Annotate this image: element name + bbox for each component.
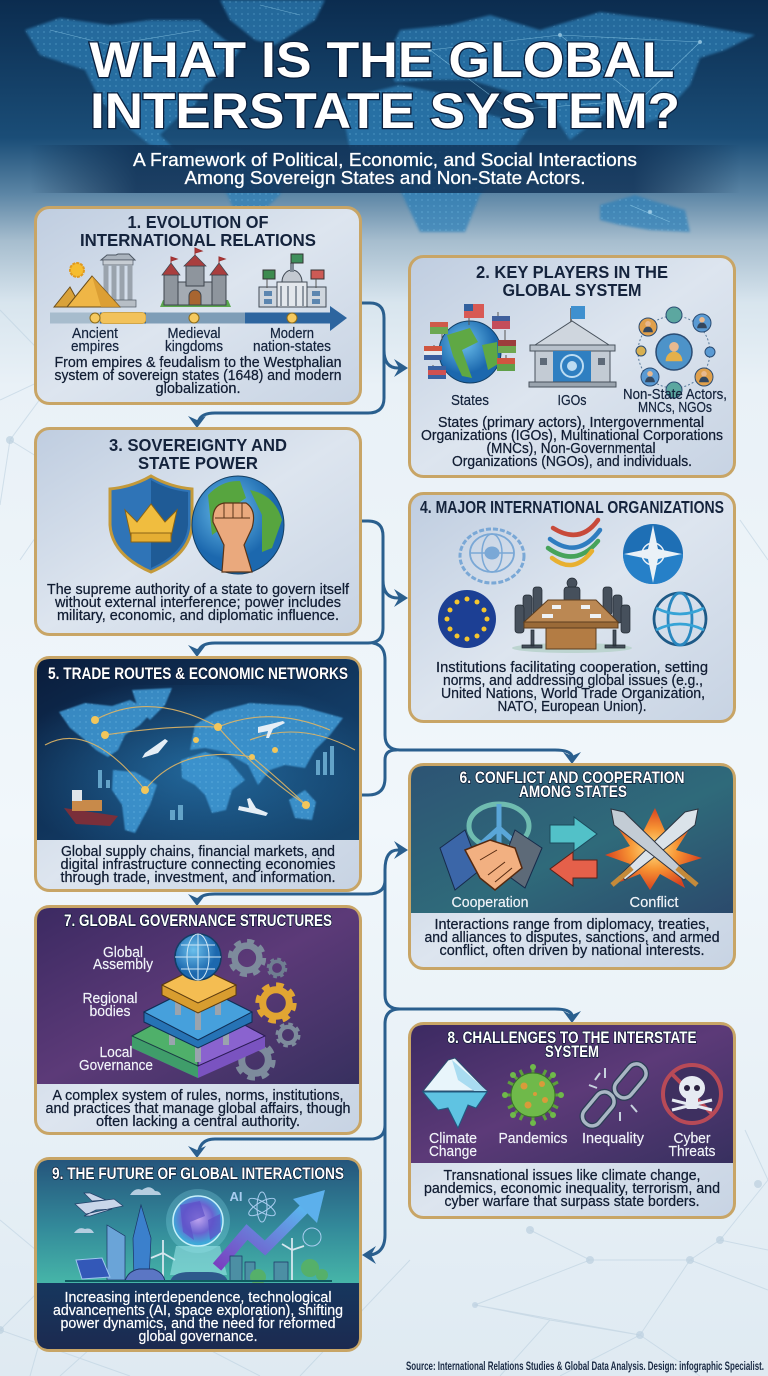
icon: globe with flags [424, 304, 516, 383]
labels 2: Non-State Actors, [623, 387, 727, 403]
heading 8: SYSTEM [545, 1042, 599, 1061]
description 1: system of sovereign states (1648) and modern [54, 368, 342, 384]
map network lights [50, 5, 702, 222]
description 3: without external interference; power includes [54, 595, 341, 611]
timeline labels: kingdoms [165, 339, 223, 355]
description 2: States (primary actors), Intergovernmental [438, 415, 704, 431]
labels 6: Conflict [630, 895, 678, 911]
labels 2: MNCs, NGOs [638, 400, 712, 416]
timeline labels: empires [71, 339, 119, 355]
description 4: United Nations, World Trade Organization, [441, 686, 705, 702]
heading 6 [460, 768, 684, 801]
labels 2 [451, 387, 727, 416]
labels 8: Pandemics [498, 1131, 568, 1147]
description 7: A complex system of rules, norms, institutions, [52, 1088, 344, 1104]
header world map [25, 0, 755, 232]
description 2 [421, 415, 723, 470]
description 9: Increasing interdependence, technological [64, 1290, 332, 1306]
description 7: often lacking a central authority. [96, 1114, 300, 1130]
icon: World Bank globe [654, 593, 706, 645]
governance labels: bodies [90, 1004, 130, 1020]
icon: modern capitol [259, 254, 326, 307]
description 5 [60, 844, 336, 886]
subtitle: Among Sovereign States and Non-State Actors. [184, 167, 586, 188]
timeline arrow [50, 306, 347, 331]
future scene illustration [37, 1160, 359, 1285]
governance labels: Local [100, 1045, 132, 1061]
description 6: conflict, often driven by national interests. [440, 943, 704, 959]
subtitle: A Framework of Political, Economic, and Social Interactions [133, 149, 637, 170]
heading 9: 9. THE FUTURE OF GLOBAL INTERACTIONS [52, 1164, 344, 1183]
panel 5: trade routes [36, 658, 360, 890]
description 8: pandemics, economic inequality, terrorism, and [424, 1181, 720, 1197]
labels 8: Cyber [674, 1131, 711, 1147]
timeline labels [71, 326, 331, 355]
icon: IGO building [529, 306, 616, 387]
description 7: and practices that manage global affairs, though [46, 1101, 350, 1117]
labels 2: States [451, 393, 489, 409]
icon: medieval castle [160, 248, 231, 307]
description 6: and alliances to disputes, sanctions, and armed [424, 930, 720, 946]
heading 3 [109, 435, 287, 473]
future scene illustration: AI [230, 1189, 242, 1204]
icon: globe with raised fist [192, 476, 284, 574]
heading 2: 2. KEY PLAYERS IN THE [476, 262, 668, 282]
icon: gears [231, 942, 298, 1077]
heading 1: INTERNATIONAL RELATIONS [80, 230, 316, 250]
icon: virus [502, 1064, 564, 1126]
icon: EU flag [438, 590, 496, 648]
panel 1: evolution [36, 208, 360, 404]
governance labels: Assembly [93, 957, 154, 973]
description 5: through trade, investment, and information. [60, 870, 336, 886]
icon: conference table [512, 578, 632, 653]
panel 7: global governance [36, 906, 360, 1134]
labels 8: Inequality [582, 1131, 645, 1147]
description 9 [53, 1290, 343, 1345]
heading 6: 6. CONFLICT AND COOPERATION [460, 768, 684, 787]
description 9: global governance. [138, 1329, 258, 1345]
description 5: digital infrastructure connecting economies [60, 857, 336, 873]
title: WHAT IS THE GLOBAL [90, 32, 674, 88]
panel 8: challenges [410, 1024, 734, 1218]
dark illustration area [411, 766, 733, 913]
heading 2 [476, 262, 668, 300]
governance labels: Governance [79, 1058, 153, 1074]
timeline labels: Ancient [72, 326, 118, 342]
description 4: NATO, European Union). [498, 699, 646, 715]
labels 8 [429, 1131, 716, 1160]
description 1: From empires & feudalism to the Westphalian [54, 355, 342, 371]
icon: peace sign and handshake [440, 804, 542, 890]
panel 3: sovereignty [36, 428, 360, 634]
heading 6: AMONG STATES [519, 782, 627, 801]
dark illustration area [411, 1025, 733, 1163]
description 5: Global supply chains, financial markets, and [61, 844, 335, 860]
description 6 [424, 917, 720, 959]
description 3 [47, 582, 350, 624]
dark illustration area [37, 908, 359, 1084]
timeline labels: Modern [270, 326, 314, 342]
icon: UN emblem [460, 529, 524, 583]
panel 2: key players [410, 256, 734, 476]
icon: non-state actors network [636, 307, 715, 398]
labels 8: Threats [668, 1144, 716, 1160]
description 1: globalization. [156, 381, 240, 397]
icon: WTO logo [548, 520, 600, 565]
labels 8: Climate [429, 1131, 477, 1147]
icon: shield with crown [110, 476, 192, 572]
description 8: Transnational issues like climate change, [444, 1168, 700, 1184]
icon: exchange arrows [550, 817, 597, 886]
description 4: norms, and addressing global issues (e.g., [443, 673, 703, 689]
background network pattern [0, 300, 768, 1376]
labels 8: Change [429, 1144, 477, 1160]
governance labels: Regional [82, 991, 138, 1007]
title: INTERSTATE SYSTEM? [90, 83, 680, 139]
heading 3: 3. SOVEREIGNTY AND [109, 435, 287, 455]
description 6: Interactions range from diplomacy, treaties, [434, 917, 710, 933]
timeline labels: Medieval [168, 326, 220, 342]
governance labels [79, 945, 154, 1074]
heading 8 [448, 1028, 696, 1061]
connector arrows between panels [188, 303, 581, 1264]
heading 2: GLOBAL SYSTEM [502, 280, 642, 300]
panel 4: organizations [410, 494, 734, 722]
heading 1 [80, 212, 316, 250]
panel 9: the future [36, 1158, 360, 1350]
icon: tiered pyramid with globe [132, 934, 265, 1078]
description 2: Organizations (IGOs), Multinational Corporations [421, 428, 723, 444]
dark text band [37, 1283, 359, 1349]
description 9: advancements (AI, space exploration), shifting [53, 1303, 343, 1319]
trade map image area [37, 659, 359, 840]
labels 2: IGOs [558, 393, 586, 409]
timeline labels: nation-states [253, 339, 331, 355]
description 7 [46, 1088, 350, 1130]
description 3: The supreme authority of a state to govern itself [47, 582, 350, 598]
description 2: Organizations (NGOs), and individuals. [452, 454, 692, 470]
heading 1: 1. EVOLUTION OF [128, 212, 269, 232]
description 4 [436, 660, 708, 715]
labels 6: Cooperation [452, 895, 528, 911]
subtitle [30, 145, 740, 193]
panel 6: conflict and cooperation [410, 764, 734, 968]
icon: melting iceberg [423, 1058, 487, 1128]
labels 6 [452, 895, 678, 911]
description 4: Institutions facilitating cooperation, setting [436, 660, 708, 676]
description 1 [54, 355, 342, 397]
title [90, 32, 680, 139]
description 3: military, economic, and diplomatic influence. [57, 608, 339, 624]
description 9: power dynamics, and the need for reformed [60, 1316, 336, 1332]
description 8 [424, 1168, 720, 1210]
heading 7: 7. GLOBAL GOVERNANCE STRUCTURES [64, 911, 332, 930]
icon: cyber threat prohibition [663, 1065, 721, 1123]
icon: NATO emblem [623, 524, 683, 584]
heading 3: STATE POWER [138, 453, 258, 473]
icon: ancient pyramids and temple [54, 254, 136, 307]
icon: crossed swords and explosion [605, 808, 702, 890]
governance labels: Global [103, 945, 143, 961]
description 8: cyber warfare that surpass state borders. [444, 1194, 700, 1210]
heading 5: 5. TRADE ROUTES & ECONOMIC NETWORKS [48, 664, 348, 683]
description 2: (MNCs), Non-Governmental [486, 441, 656, 457]
heading 8: 8. CHALLENGES TO THE INTERSTATE [448, 1028, 696, 1047]
icon: broken chain [579, 1060, 650, 1130]
